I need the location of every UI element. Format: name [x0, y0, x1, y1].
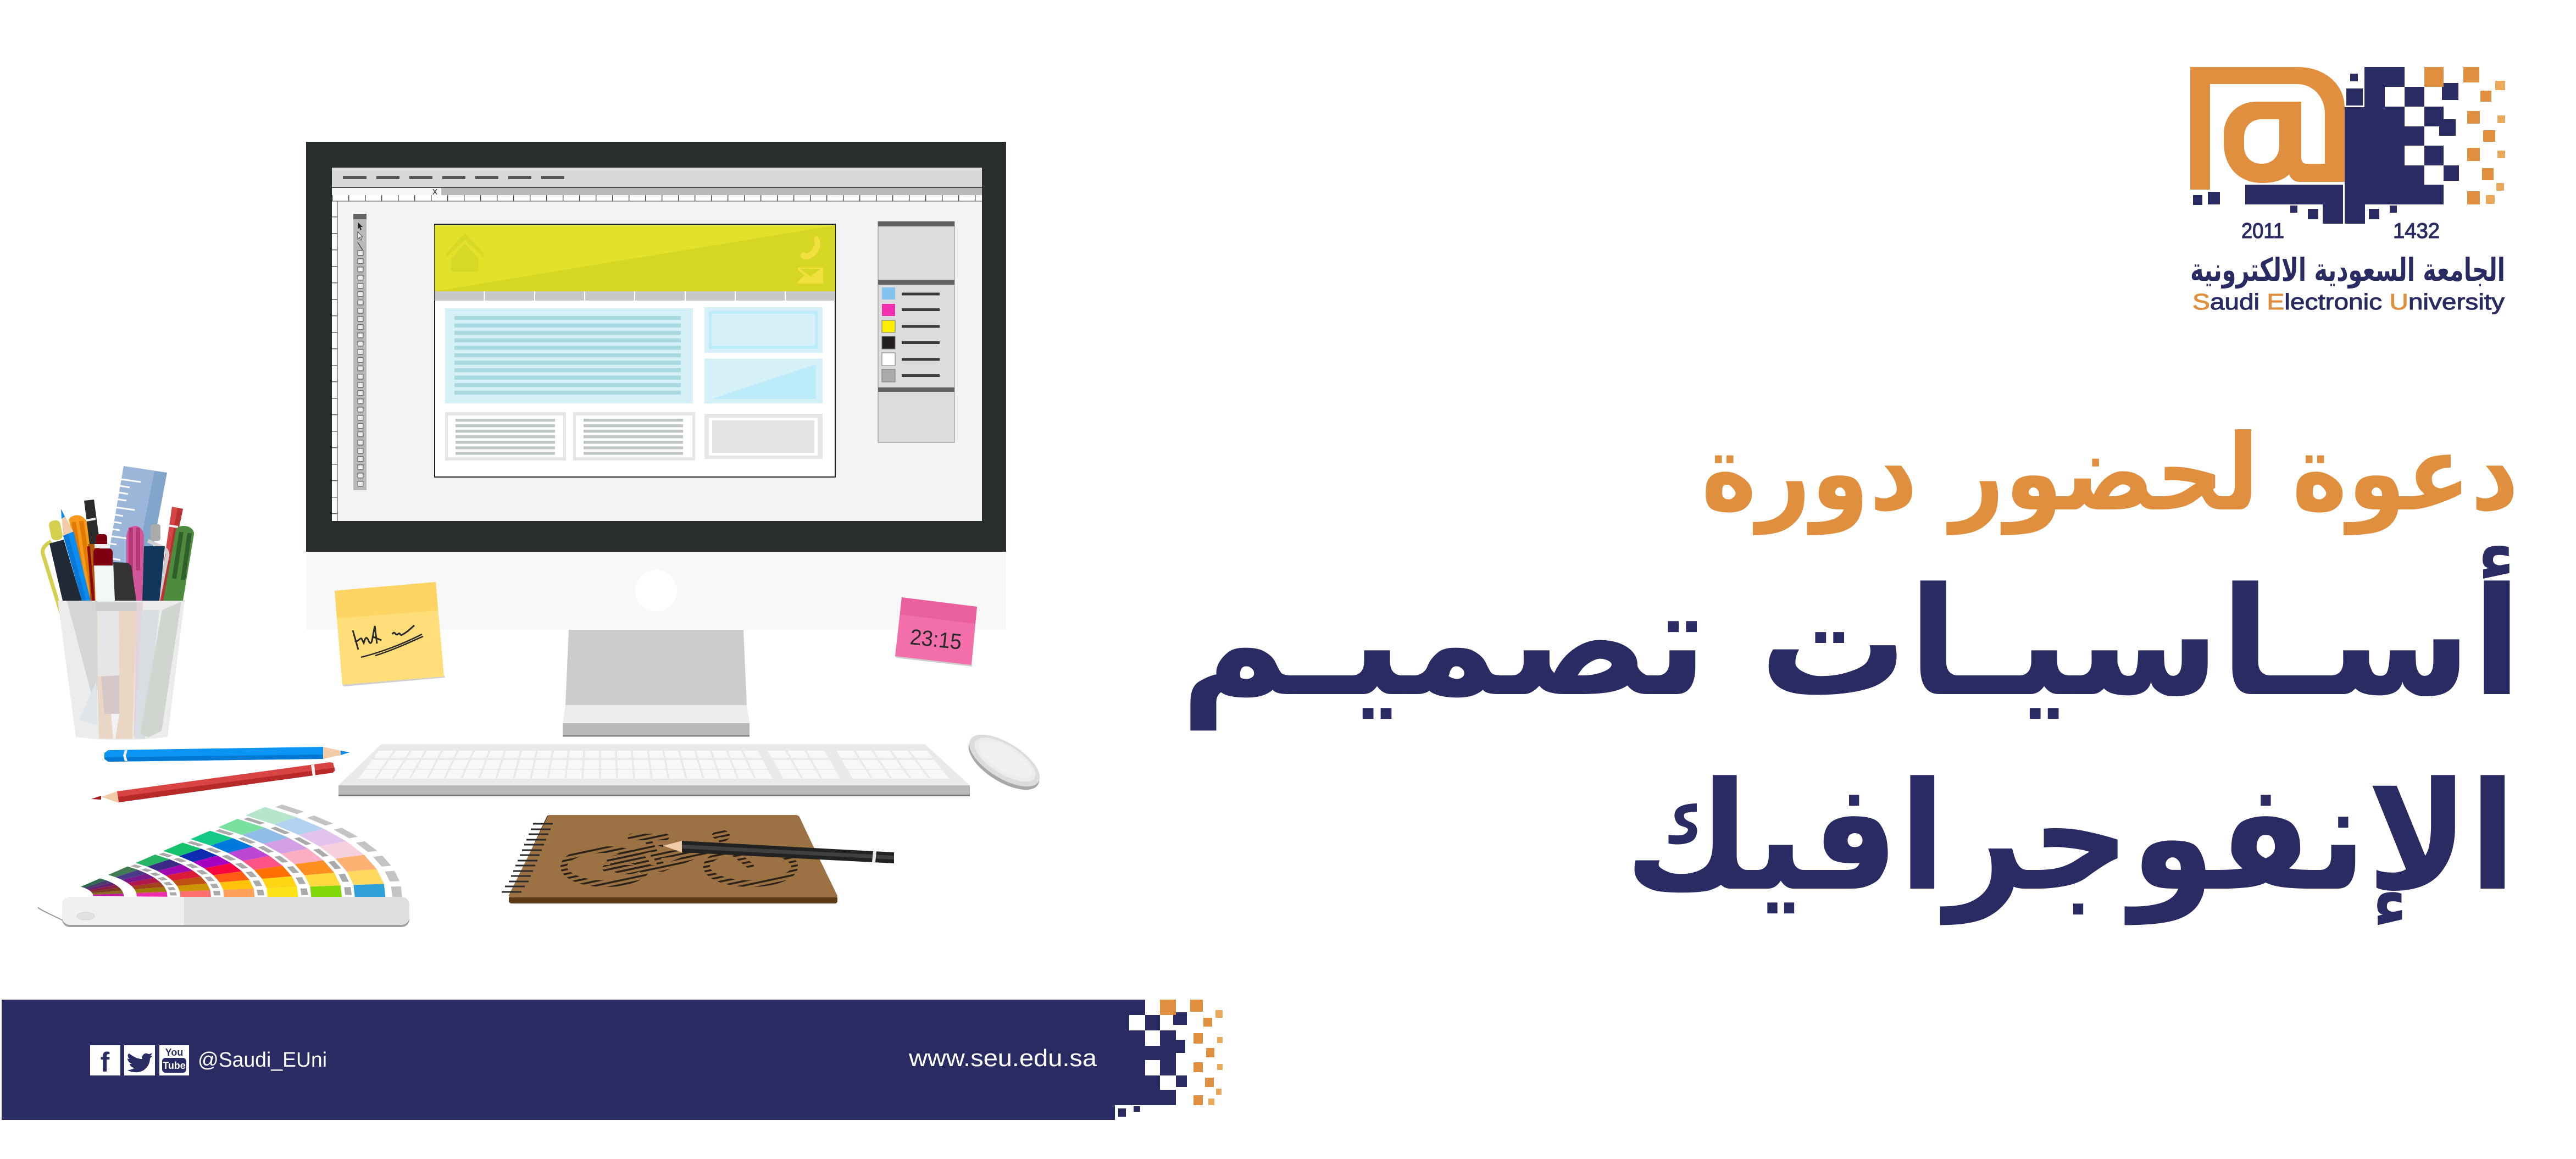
icon: facebook: f: [101, 1047, 110, 1078]
sticky note pink: [895, 597, 977, 667]
red pen: [158, 507, 183, 601]
yellow page header: [435, 225, 835, 291]
founding years: 1432: [2393, 219, 2440, 243]
university name english: Saudi Electronic University: [2192, 289, 2505, 314]
monitor: [306, 142, 1006, 630]
green pen: [163, 526, 194, 601]
spiral binding: [502, 824, 553, 892]
dark grey marker: [113, 562, 136, 601]
drawing pencil: [657, 841, 894, 863]
bottom card 1: [445, 412, 566, 461]
tools palette: [353, 214, 367, 490]
bottom card 3: [704, 414, 823, 459]
pink marker: [126, 526, 144, 601]
main text block: [445, 308, 693, 403]
swatch strip 2: [88, 868, 400, 895]
menu bar: [332, 168, 982, 188]
heading line 3: الإنفوجرافيك: [1625, 751, 2516, 926]
sticky note yellow: [335, 582, 445, 686]
swatch strip 4: [75, 839, 379, 891]
rulers: [332, 195, 982, 521]
side image box top: [704, 307, 823, 353]
icon: youtube: You: [165, 1047, 183, 1058]
colour fan: [38, 802, 409, 927]
icon: envelope: [798, 268, 823, 284]
white marker with red cap: [88, 534, 115, 601]
pen with yellow clip: [43, 519, 82, 616]
pencil cup: [43, 466, 194, 740]
orange pen: [69, 515, 98, 601]
footer bar: [2, 1000, 1223, 1120]
swatch strip 6: [62, 813, 337, 889]
mouse: [959, 724, 1049, 800]
footer pixel pattern navy: [1118, 1012, 1187, 1117]
monitor camera button: [635, 570, 677, 612]
icon: twitter: [124, 1045, 155, 1075]
swatch strip 5: [69, 825, 360, 890]
university logo: [2190, 67, 2505, 314]
web page layout: [435, 224, 835, 477]
fan handle: [38, 897, 409, 927]
icon: youtube: [159, 1045, 189, 1075]
navy pen: [142, 524, 168, 620]
swatch strip 3: [82, 853, 392, 893]
icon: home: [446, 233, 484, 272]
tab bar: [332, 188, 982, 195]
side image box bottom: [704, 358, 823, 403]
bicycle emboss: [564, 833, 795, 884]
bottom card 2: [573, 412, 695, 461]
note text: 23:15: [909, 625, 963, 655]
swatch strip 7: [54, 802, 308, 888]
footer pixel cutouts: [1129, 1015, 1176, 1090]
social handle: @Saudi_EUni: [198, 1049, 327, 1072]
founding years: 2011: [2241, 219, 2284, 243]
monitor stand: [563, 630, 750, 736]
monitor chin: [306, 551, 1006, 630]
fan swatches: [54, 802, 403, 899]
heading line 2: أسـاسيـات تصميـم: [1180, 545, 2522, 731]
handwriting: [353, 625, 414, 650]
notebook: [502, 815, 894, 903]
swatch strip 1: [93, 881, 403, 899]
black marker: [84, 500, 100, 601]
blue pencil: [61, 509, 91, 601]
logo orange pixels: [2424, 67, 2495, 204]
glass cup: [58, 601, 185, 740]
navigation bar: [435, 291, 835, 301]
red pencil on desk: [91, 762, 335, 803]
keys: [358, 751, 949, 779]
logo at sign: [2190, 67, 2345, 190]
founding years: [2241, 219, 2440, 243]
colour panel: [878, 221, 954, 442]
colour swatches: [882, 287, 895, 382]
screen background: [332, 168, 982, 521]
keyboard: [338, 744, 970, 796]
blue pencil on desk: [104, 747, 350, 762]
footer pixel pattern light orange: [1208, 1010, 1223, 1105]
icon: phone: [801, 236, 820, 259]
website url: www.seu.edu.sa: [908, 1045, 1097, 1072]
ruler: [101, 466, 167, 601]
footer pixel pattern orange: [1160, 1000, 1214, 1105]
icon: facebook: [90, 1045, 120, 1078]
icon: youtube: Tube: [163, 1060, 186, 1071]
monitor bezel: [306, 142, 1006, 552]
logo light pixels: [2486, 81, 2505, 204]
logo navy pixels: [2193, 67, 2459, 224]
